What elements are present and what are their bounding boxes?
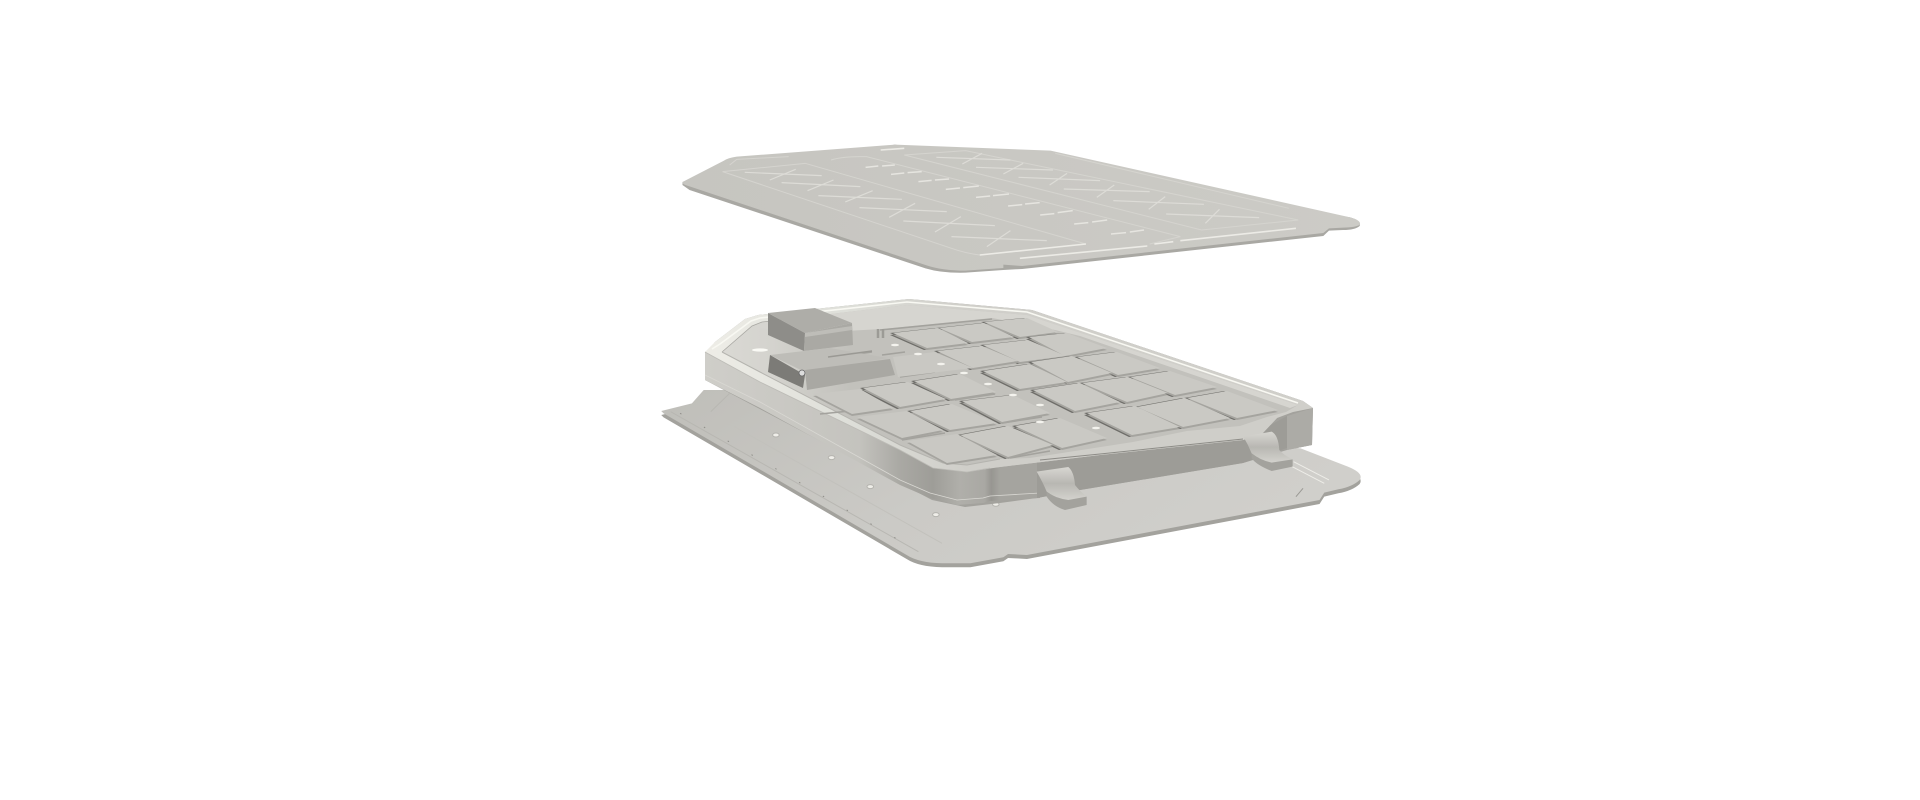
plate edge rivets [680, 413, 904, 543]
floor rails [820, 319, 1050, 458]
tray front wall [1037, 416, 1287, 498]
lid edge thickness [682, 145, 1360, 273]
tray rim [705, 299, 1313, 472]
tray front seam line [1040, 439, 1243, 460]
top cover lid [682, 145, 1360, 273]
tray floor [722, 305, 1298, 465]
plate edge fine line [671, 393, 918, 552]
plate right grooves [1289, 462, 1329, 483]
tray near inner edge line [722, 352, 1000, 465]
tray front rim band [960, 417, 1277, 472]
tray outer silhouette [705, 299, 1313, 507]
tray inner rim thin dark line [722, 319, 790, 352]
pegs [878, 329, 883, 338]
tray rim lower edge line [705, 352, 990, 472]
tray rim highlight [712, 302, 1298, 403]
plate edge thickness [661, 394, 1361, 567]
lid panel outlines [723, 151, 1298, 255]
battery module grid [813, 318, 1278, 463]
control box lower [768, 348, 895, 390]
module connectors [891, 344, 1100, 429]
control box upper [768, 308, 853, 351]
tray far inner wall [752, 305, 1298, 408]
battery tray [705, 299, 1313, 510]
tray near wall [705, 352, 1040, 505]
plate bolt holes [773, 433, 999, 517]
floor slit [752, 348, 768, 352]
lid X ribs right [936, 153, 1259, 223]
mounting bracket left [1037, 467, 1087, 510]
plate top face [661, 390, 1361, 563]
mounting bracket right [1243, 432, 1293, 471]
tray near wall seam [705, 375, 1040, 500]
bottom base plate [661, 390, 1361, 567]
tray right end wall [1287, 408, 1313, 450]
lid bright slots [881, 148, 1296, 258]
lid top face [682, 145, 1360, 271]
lid middle dashes [866, 165, 1144, 234]
lid X ribs left [745, 169, 1047, 247]
